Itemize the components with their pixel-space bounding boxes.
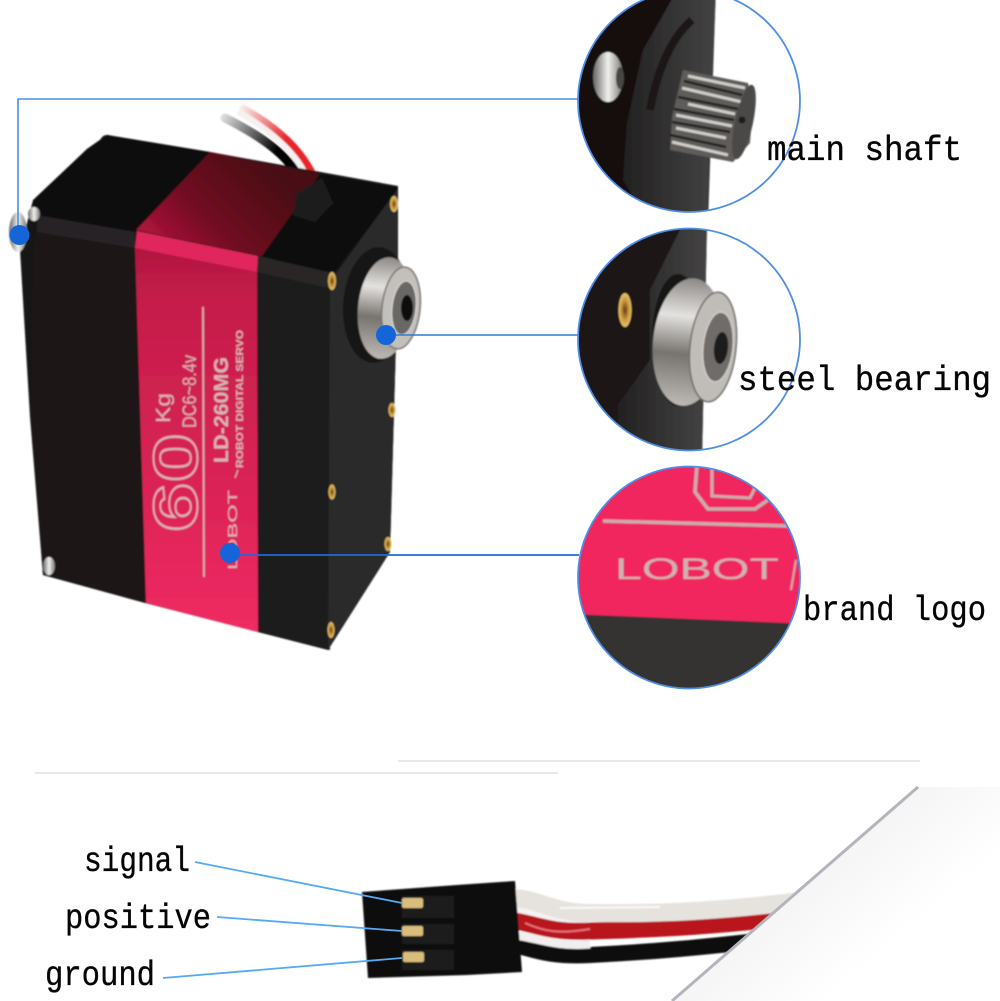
contact windows bbox=[402, 896, 454, 970]
hex bolt bbox=[593, 52, 623, 102]
connector body bbox=[362, 881, 522, 978]
label: signal: signal bbox=[84, 842, 190, 882]
label: main shaft: main shaft bbox=[767, 131, 962, 171]
voltage: DC6~8.4v bbox=[180, 355, 201, 428]
blue leader line: logo bbox=[230, 554, 579, 556]
connector photo bbox=[362, 881, 800, 978]
label: ground: ground bbox=[45, 956, 155, 996]
bearing body bbox=[652, 277, 714, 407]
numeral inner fragment bbox=[712, 465, 755, 498]
numeral fragment bbox=[695, 465, 775, 509]
dot: logo bbox=[220, 543, 240, 563]
shoulder highlight bbox=[37, 215, 135, 248]
pinion bbox=[670, 70, 761, 162]
bolt socket bbox=[616, 67, 624, 89]
right face bbox=[328, 190, 398, 650]
dot: bearing bbox=[376, 325, 396, 345]
red wire bbox=[515, 916, 800, 931]
diagonal page corner bbox=[672, 787, 1000, 1001]
front bolts bbox=[9, 207, 55, 575]
bearing face bbox=[688, 290, 738, 404]
seal bbox=[703, 312, 733, 382]
bearing seal bbox=[389, 280, 419, 336]
bearing face bbox=[378, 265, 424, 351]
bearing boss bbox=[652, 274, 687, 406]
black wire bbox=[515, 936, 800, 955]
red highlight bbox=[525, 923, 590, 932]
connector leader lines bbox=[163, 862, 402, 978]
left front black section bbox=[31, 217, 146, 603]
band highlight bbox=[135, 231, 258, 272]
right shoulder bbox=[257, 256, 332, 288]
silhouette bbox=[20, 135, 398, 650]
top connector bbox=[293, 178, 333, 222]
wires bbox=[515, 898, 800, 955]
top black face bbox=[33, 135, 210, 232]
zoom circle: steel bearing bbox=[570, 220, 800, 460]
bearing boss bbox=[339, 245, 413, 365]
red front band bbox=[135, 248, 258, 632]
red field bbox=[578, 467, 800, 624]
white divider bbox=[515, 910, 590, 923]
robot digital servo: ROBOT DIGITAL SERVO bbox=[234, 330, 246, 468]
dark body bbox=[570, 0, 716, 220]
brass insert bbox=[618, 293, 632, 327]
dot: main shaft bbox=[10, 225, 30, 245]
blue leader line: bearing bbox=[387, 334, 579, 336]
zoom circle: main shaft bbox=[570, 0, 800, 220]
white backing bbox=[515, 935, 590, 945]
bore bbox=[712, 331, 730, 365]
groove bbox=[650, 20, 692, 110]
rear bolt bbox=[101, 136, 113, 148]
bearing bore bbox=[401, 295, 413, 321]
top red band bbox=[136, 152, 320, 256]
gray plate bbox=[618, 226, 707, 460]
lobot text: LOBOT bbox=[615, 553, 779, 586]
dark body bbox=[578, 230, 707, 448]
model 60: 60 bbox=[142, 433, 211, 532]
white highlight bbox=[560, 907, 660, 908]
pins bbox=[402, 898, 424, 962]
bearing body bbox=[353, 254, 417, 362]
label: positive: positive bbox=[65, 899, 211, 939]
right front black section bbox=[256, 258, 332, 650]
brass inserts bbox=[328, 196, 398, 638]
top right black bbox=[262, 174, 398, 275]
gray plate bbox=[623, 0, 716, 220]
servo cable bbox=[225, 108, 322, 195]
servo photo bbox=[9, 108, 424, 650]
white wire bbox=[515, 898, 800, 913]
model name: LD-260MG bbox=[211, 357, 233, 463]
slash bbox=[791, 560, 796, 590]
divider bbox=[603, 521, 790, 526]
band printing bbox=[142, 307, 246, 577]
black lower part bbox=[585, 614, 790, 688]
lobot logo: LOBOT bbox=[225, 490, 240, 570]
slash bbox=[235, 470, 238, 478]
divider line bbox=[203, 307, 204, 577]
divider lines bbox=[35, 761, 920, 773]
blue leader line: main shaft bbox=[18, 99, 579, 232]
kg: Kg bbox=[153, 393, 175, 423]
zoom circle: brand logo bbox=[577, 466, 801, 690]
